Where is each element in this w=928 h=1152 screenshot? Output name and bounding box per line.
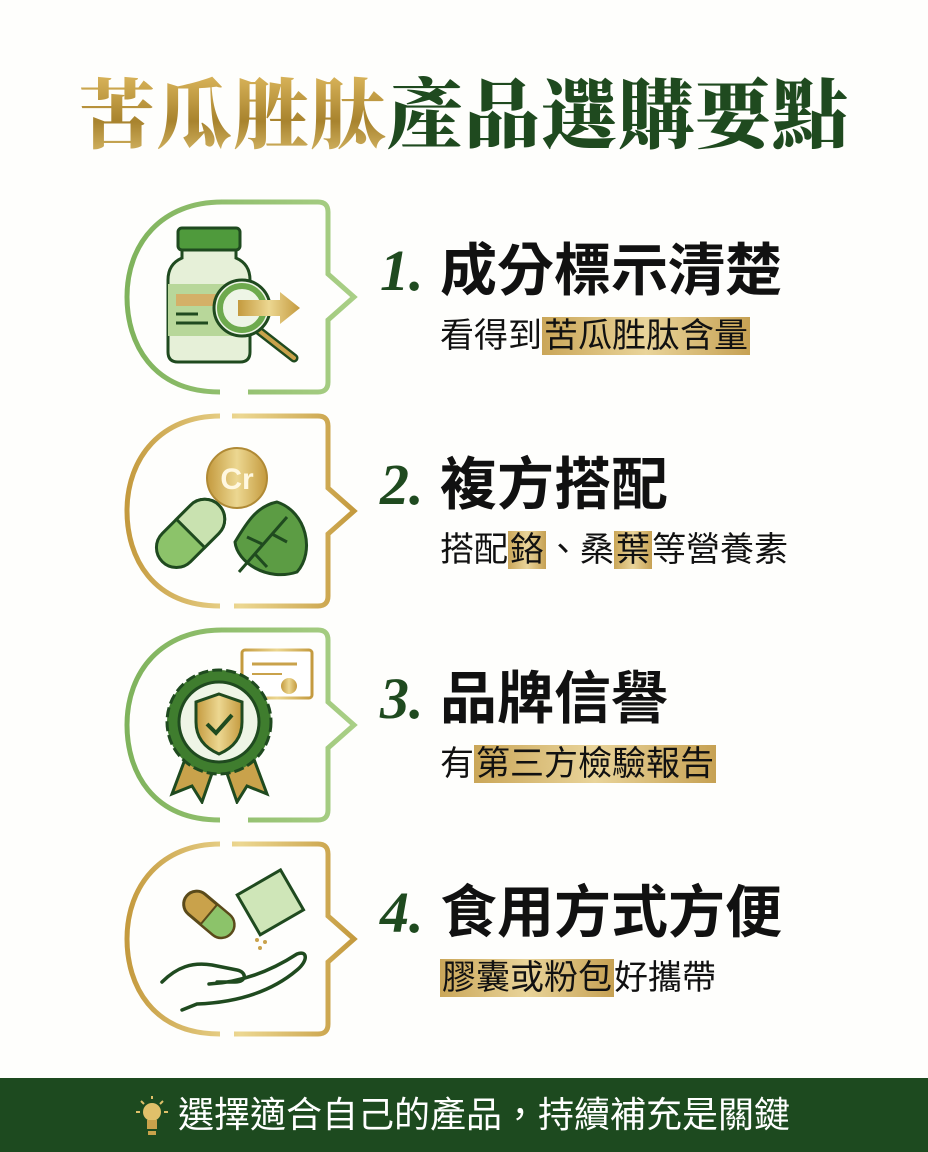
heading 2: 複方搭配 xyxy=(440,453,668,517)
icon: shield badge with certificate xyxy=(166,648,314,804)
subtext 2: 搭配鉻、桑葉等營養素 xyxy=(440,531,788,569)
heading 3: 3. xyxy=(380,666,424,731)
item 4 xyxy=(124,842,782,1036)
subtext 4: 膠囊或粉包好攜帶 xyxy=(442,959,716,997)
subtext 3: 有第三方檢驗報告 xyxy=(440,745,714,783)
item 1 xyxy=(124,200,782,394)
icon: Cr coin, capsule, leaf xyxy=(154,447,308,576)
heading 4: 4. xyxy=(380,880,424,945)
icon: bottle with magnifier xyxy=(166,226,300,364)
heading 4: 食用方式方便 xyxy=(440,881,782,945)
icon: Cr coin, capsule, leaf: Cr xyxy=(220,463,254,496)
subtext 1: 看得到苦瓜胜肽含量 xyxy=(440,317,748,355)
heading 1: 成分標示清楚 xyxy=(440,239,782,303)
heading 2: 2. xyxy=(380,452,424,517)
frame 4 xyxy=(124,842,358,1036)
item 2 xyxy=(124,414,788,608)
icon: hand with capsule and sachet xyxy=(160,868,307,1012)
title: 苦瓜胜肽產品選購要點 xyxy=(79,75,849,159)
frame 2 xyxy=(124,414,358,608)
frame 1 xyxy=(124,200,358,394)
heading 3: 品牌信譽 xyxy=(440,667,668,731)
footer banner xyxy=(0,1078,928,1152)
heading 1: 1. xyxy=(380,238,424,303)
frame 3 xyxy=(124,628,358,822)
item 3 xyxy=(124,628,716,822)
icon: light bulb xyxy=(136,1096,168,1135)
footer text: 選擇適合自己的產品，持續補充是關鍵 xyxy=(178,1094,790,1135)
